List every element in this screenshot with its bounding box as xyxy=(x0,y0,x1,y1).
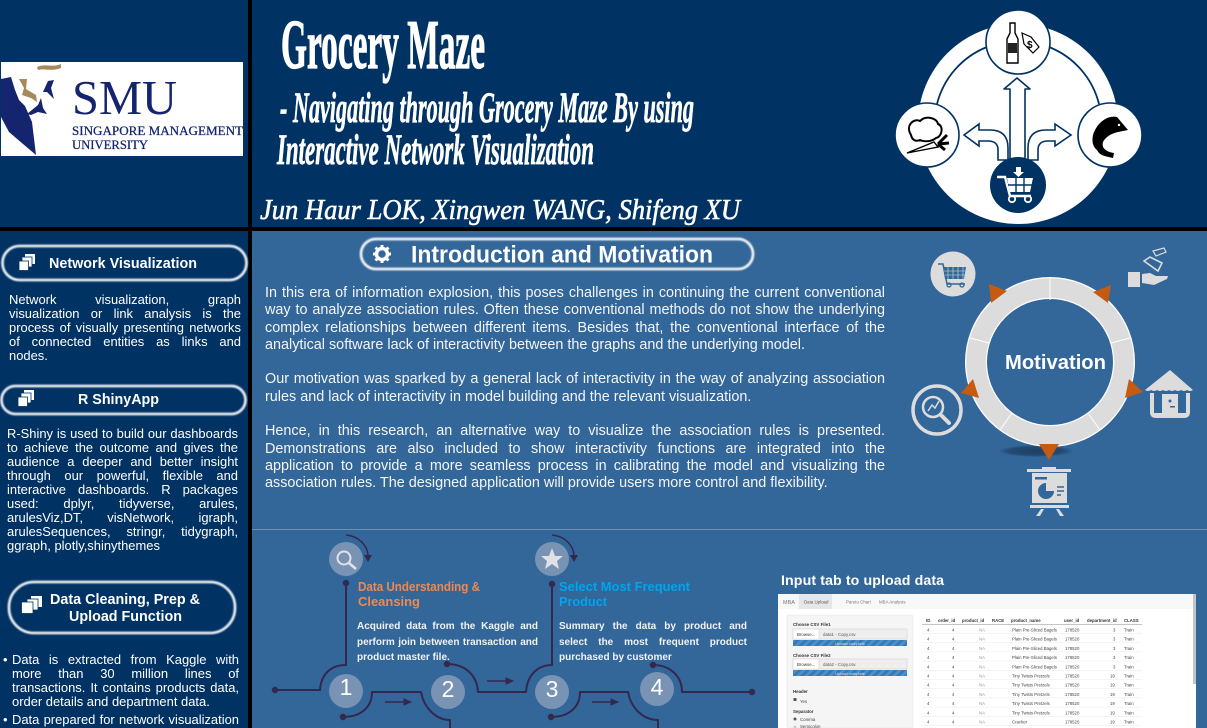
data table: CLASS xyxy=(1124,618,1139,623)
section separator xyxy=(252,529,1207,530)
text: introduction paragraphs: association rules. The designed application will provide users more control and flexibility. xyxy=(265,475,828,491)
icon: gear xyxy=(373,245,391,263)
text: data bullets: • xyxy=(3,712,8,727)
upload sidebar: Browse... xyxy=(797,662,815,667)
data table: Cracker xyxy=(1012,720,1028,724)
icon: cart xyxy=(930,252,976,296)
text: data bullets: Data prepared for network visualization xyxy=(12,712,239,727)
heading pill: Data Cleaning xyxy=(6,580,238,636)
text: introduction paragraphs: In this era of information explosion, this poses challenges in continuing the current conventional xyxy=(265,285,885,301)
data table: 4 xyxy=(927,655,930,660)
data table: 4 xyxy=(952,701,955,706)
data table: 178520 xyxy=(1065,692,1080,697)
data table: NA xyxy=(979,646,985,651)
data table: Train xyxy=(1124,646,1134,651)
upload sidebar: Separator xyxy=(793,709,814,714)
subtitle line 2: Interactive Network Visualization xyxy=(276,127,594,174)
step 1: 1 xyxy=(340,674,352,700)
step 4: 4 xyxy=(651,674,664,700)
data table: 178520 xyxy=(1065,683,1080,688)
authors: Jun Haur LOK, Xingwen WANG, Shifeng XU xyxy=(260,195,742,226)
data table: product_id xyxy=(962,618,985,623)
star icon node xyxy=(535,535,578,576)
data table: NA xyxy=(979,628,985,632)
step 4 xyxy=(640,672,674,706)
title block: Grocery Maze xyxy=(281,7,485,84)
text: introduction paragraphs xyxy=(265,285,885,491)
data table: Train xyxy=(1124,720,1134,724)
data table: NA xyxy=(979,674,985,678)
upload sidebar: Header xyxy=(793,689,808,694)
data table: Plain Pre-Sliced Bagels xyxy=(1012,646,1057,651)
data table: 4 xyxy=(952,692,955,697)
icon: shop house xyxy=(1145,370,1193,418)
text: step 2 description: purchased by customer xyxy=(559,652,672,663)
data table: ID xyxy=(926,618,930,623)
subtitle line 1: - Navigating through Grocery Maze By using xyxy=(280,85,694,132)
data table: 4 xyxy=(952,637,955,642)
data table: 4 xyxy=(952,664,955,669)
diagram: grocery paths xyxy=(896,10,1142,224)
icon: magnifier xyxy=(913,386,961,434)
heading pill: Data Cleaning: Data Cleaning, Prep & xyxy=(50,592,201,608)
upload sidebar: data2 - Copy.csv xyxy=(823,662,856,667)
data table: Train xyxy=(1124,701,1134,706)
data table: 178520 xyxy=(1065,664,1080,669)
data table: Train xyxy=(1124,674,1134,678)
data table: 3 xyxy=(1113,637,1116,642)
heading pill: Introduction and Motivation: Introduction and Motivation xyxy=(411,242,713,268)
step 3: 3 xyxy=(546,676,558,702)
data table: 4 xyxy=(952,683,955,688)
text: R Shiny description: arulesSequences, stringr, tidygraph, xyxy=(7,524,238,539)
data table: 3 xyxy=(1113,655,1116,660)
data table: 178520 xyxy=(1065,701,1080,706)
heading: Select Most Frequent Product: Select Most Frequent xyxy=(559,580,691,594)
data table: NA xyxy=(979,692,985,697)
text: step 2 description: Summary the data by product and xyxy=(559,621,747,632)
upload sidebar xyxy=(787,615,913,728)
data table: Tiny Twists Pretzels xyxy=(1012,674,1050,678)
heading: Data Understanding xyxy=(358,580,480,609)
text: introduction paragraphs: application to provide a more seamless process in calibrating the model and visualizing the xyxy=(265,458,885,474)
navigation tabs: MBA xyxy=(783,600,795,606)
data table: Train xyxy=(1124,692,1134,697)
data table: Tiny Twists Pretzels xyxy=(1012,692,1050,697)
data table: 178520 xyxy=(1065,637,1080,642)
flow arrows xyxy=(385,678,618,705)
data table xyxy=(922,618,1142,726)
upload sidebar: Upload complete xyxy=(835,671,866,676)
data table: Plain Pre-Sliced Bagels xyxy=(1012,664,1057,669)
heading pill: R ShinyApp xyxy=(0,384,248,416)
heading: Input tab to upload data: Input tab to upload data xyxy=(781,573,944,589)
text: network visualization description: process of visually presenting networks xyxy=(9,320,241,335)
data table: 4 xyxy=(927,637,930,642)
data table: 4 xyxy=(927,701,930,706)
data table: Train xyxy=(1124,637,1134,642)
data table: NA xyxy=(979,720,985,724)
text: introduction paragraphs: Our motivation was sparked by a general lack of interactivity in the way of analyzing association xyxy=(265,371,885,387)
data table: order_id xyxy=(938,618,956,623)
upload sidebar: Comma xyxy=(800,717,816,722)
text: network visualization description: visualization or link analysis is the xyxy=(9,306,241,321)
text: R Shiny description: R-Shiny is used to build our dashboards xyxy=(7,426,238,441)
data table: 4 xyxy=(927,692,930,697)
step 1 xyxy=(329,674,363,708)
data table: user_id xyxy=(1064,618,1080,623)
step 2: 2 xyxy=(442,676,454,702)
logo: SMU: SINGAPORE MANAGEMENT xyxy=(72,123,243,138)
heading: Select Most Frequent Product: Product xyxy=(559,595,608,609)
text: introduction paragraphs: analytical software lack of interactivity between the graphs and the underlying model. xyxy=(265,337,805,353)
text: network visualization description xyxy=(9,292,241,363)
data table: Train xyxy=(1124,655,1134,660)
data table: 178520 xyxy=(1065,655,1080,660)
data table: 19 xyxy=(1110,674,1115,678)
icon: money in hand xyxy=(1128,248,1168,287)
text: step 2 description xyxy=(559,621,747,663)
navigation tabs xyxy=(783,594,906,609)
text: data bullets: order details and department data. xyxy=(12,694,210,709)
heading: Select Most Frequent Product xyxy=(559,580,691,609)
heading pill: Introduction and Motivation xyxy=(358,236,756,272)
text: R Shiny description: ggraph, plotly,shinythemes xyxy=(7,538,160,553)
navigation tabs: Data Upload xyxy=(804,600,829,604)
data table: NA xyxy=(979,701,985,706)
step 3 xyxy=(535,675,569,709)
diagram: process flow xyxy=(272,534,756,728)
icon: fish xyxy=(1078,103,1142,167)
data table: 4 xyxy=(927,710,930,715)
data table: 4 xyxy=(927,720,930,724)
data table: Train xyxy=(1124,683,1134,688)
data table: Plain Pre-Sliced Bagels xyxy=(1012,637,1057,642)
data table: 4 xyxy=(927,664,930,669)
divider: horizontal black bar xyxy=(0,227,1207,231)
data table: Train xyxy=(1124,664,1134,669)
icon: bottle and price tag xyxy=(986,10,1050,74)
text: R Shiny description: audience a deeper and better insight xyxy=(7,454,238,469)
navigation tabs: Pareto Chart xyxy=(846,600,872,604)
text: network visualization description: nodes. xyxy=(9,348,48,363)
data table: 178520 xyxy=(1065,720,1080,724)
data table: Plain Pre-Sliced Bagels xyxy=(1012,628,1057,632)
data table: department_id xyxy=(1087,618,1117,623)
search icon node xyxy=(329,535,372,576)
data table: 4 xyxy=(952,646,955,651)
arrow: right xyxy=(1028,124,1071,160)
data table: 178520 xyxy=(1065,646,1080,651)
navigation tabs: MBA Analysis xyxy=(879,600,906,604)
data table: Tiny Twists Pretzels xyxy=(1012,710,1050,715)
logo: SMU xyxy=(1,62,243,156)
arrows: orange markers xyxy=(961,284,1143,460)
upload sidebar: Yes xyxy=(800,699,808,704)
arrow: left xyxy=(964,124,1008,160)
data table: 4 xyxy=(927,646,930,651)
text: introduction paragraphs: way to analyze association rules. Often these conventional methods do not show the underlying xyxy=(265,302,885,318)
upload sidebar: Browse... xyxy=(797,632,815,637)
upload sidebar: Upload complete xyxy=(835,641,866,646)
text: R Shiny description: through our powerful, flexible and xyxy=(7,468,238,483)
text: step 1 description xyxy=(357,621,538,663)
data table: 178520 xyxy=(1065,628,1080,632)
data table: 4 xyxy=(927,628,930,632)
data table: 178520 xyxy=(1065,710,1080,715)
panel: main content background xyxy=(252,231,1207,728)
data table: NA xyxy=(979,637,985,642)
data table: 19 xyxy=(1110,701,1115,706)
data table: Tiny Twists Pretzels xyxy=(1012,701,1050,706)
screenshot: data upload app xyxy=(778,594,1196,728)
data table: 3 xyxy=(1113,646,1116,651)
data table: 19 xyxy=(1110,683,1115,688)
icon: vegetables xyxy=(895,103,959,167)
text: step 1 description: perform join between transaction and xyxy=(357,637,538,648)
data table: 19 xyxy=(1110,710,1115,715)
text: step 2 description: select the most frequent product xyxy=(559,637,747,648)
upload sidebar: data1 - Copy.csv xyxy=(823,632,856,637)
divider: vertical black bar xyxy=(248,0,252,728)
shadow under ring xyxy=(998,445,1074,457)
heading pill: Data Cleaning: Upload Function xyxy=(69,609,182,625)
data table: 4 xyxy=(952,710,955,715)
data table: 178520 xyxy=(1065,674,1080,678)
text: data bullets xyxy=(3,652,239,727)
text: R Shiny description: interactive dashboards. R packages xyxy=(7,482,238,497)
upload sidebar: Choose CSV File1 xyxy=(793,622,831,627)
text: introduction paragraphs: complex relationships between different items. Besides that, the conventional interface of the xyxy=(265,320,885,336)
data table: NA xyxy=(979,664,985,669)
data table: NA xyxy=(979,655,985,660)
heading: Data Understanding: Cleansing xyxy=(358,595,420,609)
data table: Train xyxy=(1124,710,1134,715)
data table: NA xyxy=(979,710,985,715)
data table: 3 xyxy=(1113,664,1116,669)
text: network visualization description: Network visualization, graph xyxy=(9,292,241,307)
text: step 1 description: Acquired data from the Kaggle and xyxy=(357,621,538,632)
data table: 4 xyxy=(952,720,955,724)
heading pill: R ShinyApp: R ShinyApp xyxy=(78,392,159,408)
text: R Shiny description: used: dplyr, tidyverse, arules, xyxy=(7,496,238,511)
diagram: motivation ring xyxy=(911,247,1193,516)
text: network visualization description: of connected entities as links and xyxy=(9,334,241,349)
text: introduction paragraphs: Hence, in this research, an alternative way to visualize the association rules is presented. xyxy=(265,423,885,439)
data table: Train xyxy=(1124,628,1134,632)
text: R Shiny description: arulesViz,DT, visNetwork, igraph, xyxy=(7,510,238,525)
data table: RACE xyxy=(992,618,1004,623)
step 2 xyxy=(431,675,465,709)
data table: 4 xyxy=(927,683,930,688)
data table: product_name xyxy=(1011,618,1041,623)
text: introduction paragraphs: rules and lack of interactivity in model building and the relevant visualization. xyxy=(265,389,751,405)
text: introduction paragraphs: Demonstrations are also included to show interactivity functions are integrated into the xyxy=(265,441,885,457)
data table: 4 xyxy=(952,628,955,632)
icon: presentation board xyxy=(1027,467,1071,516)
icon: shopping cart hub xyxy=(990,157,1046,213)
data table: NA xyxy=(979,683,985,688)
icon: bottle and price tag: $ xyxy=(1027,40,1033,51)
heading pill: Network Visualization xyxy=(0,244,249,282)
label: Motivation: Motivation xyxy=(1005,351,1106,374)
text: data bullets: • xyxy=(3,652,8,667)
data table: 4 xyxy=(952,655,955,660)
data table: 19 xyxy=(1110,720,1115,724)
data table: 4 xyxy=(952,674,955,678)
logo: SMU: UNIVERSITY xyxy=(72,137,149,152)
text: R Shiny description xyxy=(7,426,238,553)
title block xyxy=(260,7,742,226)
arrow: up xyxy=(1004,78,1030,160)
text: step 1 description: product master file. xyxy=(357,652,450,663)
data table: Tiny Twists Pretzels xyxy=(1012,683,1050,688)
data table: Plain Pre-Sliced Bagels xyxy=(1012,655,1057,660)
text: data bullets: more than 30 million lines of xyxy=(12,666,239,681)
data table: 3 xyxy=(1113,628,1116,632)
text: data bullets: Data is extracted from Kaggle with xyxy=(12,652,239,667)
text: R Shiny description: to achieve the outcome and gives the xyxy=(7,440,238,455)
heading: Data Understanding: Data Understanding & xyxy=(358,580,480,594)
heading pill: Network Visualization: Network Visualization xyxy=(49,256,197,272)
logo: SMU: SMU xyxy=(72,70,177,125)
data table: 19 xyxy=(1110,692,1115,697)
upload sidebar: Choose CSV File2 xyxy=(793,653,831,658)
text: data bullets: transactions. It contains products data, xyxy=(12,680,239,695)
data table: 4 xyxy=(927,674,930,678)
